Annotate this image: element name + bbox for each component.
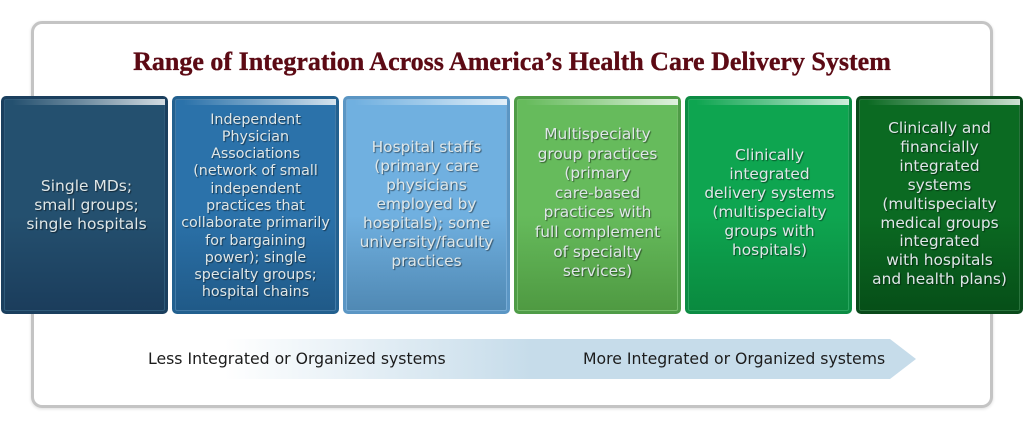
panel: single MDs: Single MDs; <box>41 177 132 195</box>
panel: clinically and financially integrated systems: integrated <box>899 157 980 175</box>
panel: clinically integrated delivery systems: (multispecialty <box>712 203 827 221</box>
panel: multispecialty group practices: group practices <box>538 145 657 163</box>
panel: clinically and financially integrated systems: financially <box>900 138 979 156</box>
panel: clinically and financially integrated systems: systems <box>908 176 971 194</box>
panel: independent physician associations: Independent <box>210 112 301 128</box>
panel: multispecialty group practices <box>514 96 681 314</box>
label: less integrated: Less Integrated or Organized systems <box>148 349 446 368</box>
panel: clinically and financially integrated systems <box>856 96 1023 314</box>
panel: hospital staffs: practices <box>391 252 462 270</box>
panel: independent physician associations <box>172 96 339 314</box>
panel: clinically and financially integrated systems: (multispecialty <box>882 195 997 213</box>
panel: clinically integrated delivery systems: integrated <box>729 165 810 183</box>
panel: hospital staffs: (primary care <box>374 157 479 175</box>
panel: clinically and financially integrated systems: integrated <box>899 232 980 250</box>
panel: independent physician associations: collaborate primarily <box>181 215 330 231</box>
panel: multispecialty group practices: of specialty <box>553 243 642 261</box>
title: Range of Integration Across America’s Health Care Delivery System <box>133 47 891 76</box>
panel: single MDs: small groups; <box>34 196 139 214</box>
panel: clinically integrated delivery systems: groups with <box>724 222 815 240</box>
panel: clinically and financially integrated systems: medical groups <box>880 214 999 232</box>
panel: clinically integrated delivery systems <box>685 96 852 314</box>
panel: independent physician associations: for bargaining <box>205 233 306 249</box>
panel: hospital staffs: physicians <box>386 176 467 194</box>
panel: independent physician associations: power); single <box>205 250 306 266</box>
panel: independent physician associations: independent <box>210 181 301 197</box>
panel: multispecialty group practices: full complement <box>535 223 660 241</box>
label: more integrated: More Integrated or Organized systems <box>583 349 885 368</box>
panel: clinically and financially integrated systems: Clinically and <box>888 119 991 137</box>
panel: multispecialty group practices: practices with <box>544 203 651 221</box>
panel: clinically and financially integrated systems: with hospitals <box>886 251 993 269</box>
panel: multispecialty group practices: care-based <box>555 184 640 202</box>
panel: independent physician associations: practices that <box>206 198 305 214</box>
panel: clinically integrated delivery systems: hospitals) <box>732 241 807 259</box>
panel: multispecialty group practices: services) <box>563 262 632 280</box>
panel: hospital staffs: Hospital staffs <box>372 138 481 156</box>
panel: hospital staffs <box>343 96 510 314</box>
panel: independent physician associations: Associations <box>211 146 300 162</box>
panel: multispecialty group practices: (primary <box>564 164 631 182</box>
panel: clinically integrated delivery systems: delivery systems <box>704 184 835 202</box>
panel: hospital staffs: hospitals); some <box>363 214 490 232</box>
panel: independent physician associations: specialty groups; <box>194 267 317 283</box>
panel: independent physician associations: Physician <box>222 129 289 145</box>
panel: hospital staffs: university/faculty <box>360 233 493 251</box>
panel: clinically and financially integrated systems: and health plans) <box>872 270 1007 288</box>
panel: single MDs: single hospitals <box>26 215 147 233</box>
panel: multispecialty group practices: Multispecialty <box>544 125 651 143</box>
panel: clinically integrated delivery systems: Clinically <box>735 146 804 164</box>
panel: hospital staffs: employed by <box>376 195 477 213</box>
panel: single MDs <box>1 96 168 314</box>
panel: independent physician associations: (network of small <box>193 163 318 179</box>
arrow: integration direction <box>268 339 916 379</box>
panel: independent physician associations: hospital chains <box>202 284 309 300</box>
